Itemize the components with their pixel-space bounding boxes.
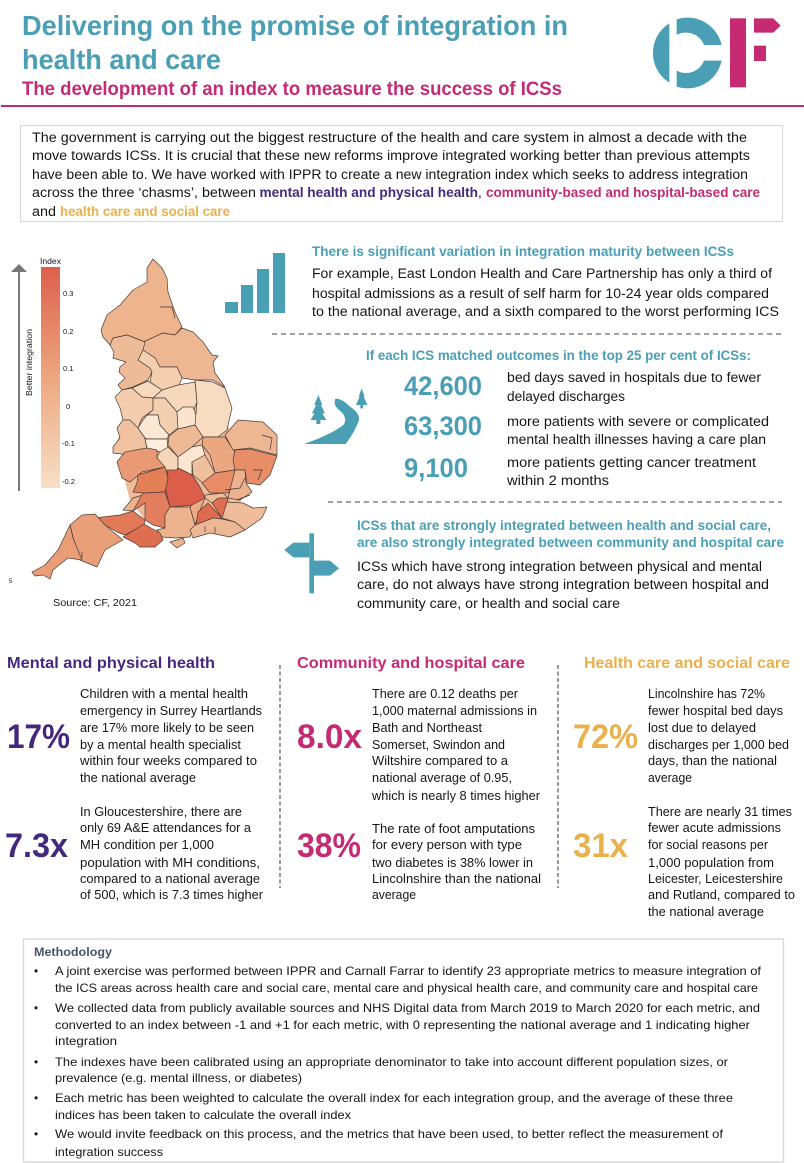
panel: health care and social care: Health care and social care: [584, 655, 790, 672]
finding: variation in maturity: hospital admissions as a result of self harm for 10-24 year olds compared: [312, 286, 769, 301]
panel: health care and social care: the national average: [648, 904, 764, 919]
statistic: bed days saved: delayed discharges: [507, 389, 625, 404]
panel: methodology: integration: [55, 1034, 117, 1048]
panel: community and hospital care: Community and hospital care: [297, 655, 525, 672]
header rule: [1, 105, 804, 107]
panel: mental and physical health: [5, 655, 264, 902]
panel: introduction: move towards ICSs. It is crucial that these new reforms improve integrated working better than previous attempts: [32, 148, 750, 163]
panel: community and hospital care: two diabetes is 38% lower in: [372, 855, 533, 870]
map marker label: 5: [9, 579, 13, 585]
panel: mental and physical health: 7.3x: [5, 827, 68, 865]
map legend: Better integration: [24, 329, 34, 396]
panel: health care and social care: lost due to delayed: [648, 720, 756, 735]
statistic: care plans: more patients with severe or complicated: [507, 414, 769, 429]
panel: community and hospital care: Somerset, Swindon and: [372, 737, 505, 752]
panel: mental and physical health: of 500, which is 7.3 times higher: [80, 887, 264, 902]
panel: community and hospital care: which is nearly 8 times higher: [371, 788, 541, 803]
panel: mental and physical health: Mental and physical health: [7, 655, 215, 672]
map source: Source: CF, 2021: [53, 597, 137, 609]
panel: methodology: Each metric has been weighted to calculate the overall index for each integration group, and the average of these three: [55, 1091, 733, 1105]
panel: mental and physical health: In Gloucestershire, there are: [80, 804, 242, 819]
finding: strongly integrated ICSs: ICSs which have strong integration between physical and mental: [357, 559, 762, 574]
statistic: care plans: [404, 411, 769, 447]
statistic: cancer treatment: 9,100: [404, 453, 468, 483]
panel: mental and physical health: only 69 A&E attendances for a: [80, 820, 252, 835]
subtitle: The development of an index to measure the success of ICSs: [22, 78, 562, 100]
panel: mental and physical health: MH condition per 1,000: [80, 837, 214, 852]
panel: health care and social care: There are nearly 31 times: [648, 804, 792, 819]
map legend: 0.2: [63, 327, 73, 336]
panel: community and hospital care: 1,000 maternal admissions in: [372, 703, 537, 718]
panel: introduction: across the three ‘chasms’, between: [32, 185, 256, 200]
panel: methodology: The indexes have been calibrated using an appropriate denominator to take into account different population sizes, or: [55, 1055, 728, 1069]
title: [22, 10, 568, 75]
icon: winding road and trees: [304, 388, 367, 444]
map legend: -0.1: [62, 439, 75, 448]
map legend: -0.2: [62, 477, 75, 486]
panel: introduction: ,: [478, 185, 482, 200]
map legend: [11, 256, 75, 491]
panel: mental and physical health: the national average: [80, 770, 196, 785]
panel: introduction: The government is carrying out the biggest restructure of the health and care system in almost a decade with the: [32, 130, 747, 145]
panel: methodology: •: [34, 1001, 38, 1015]
panel: methodology: We collected data from publicly available sources and NHS Digital data from March 2019 to March 2020 for each metric, and: [55, 1001, 760, 1015]
panel: health care and social care: 72%: [573, 718, 638, 756]
choropleth map of England: [32, 259, 277, 579]
finding: strongly integrated ICSs: [357, 518, 784, 611]
title: health and care: [22, 44, 221, 75]
icon: CF logo: [653, 18, 781, 88]
finding: variation in maturity: to the national average, and a sixth compared to the worst performing ICS: [312, 304, 779, 319]
icon: signpost: [284, 533, 339, 593]
panel: mental and physical health: population with MH conditions,: [80, 855, 260, 870]
panel: health care and social care: [573, 655, 795, 919]
panel: mental and physical health: Children with a mental health: [80, 686, 248, 701]
panel: community and hospital care: 38%: [297, 827, 361, 865]
panel: methodology: •: [34, 1127, 38, 1141]
panel: health care and social care: for social reasons per: [648, 837, 769, 852]
icon: bar chart: [225, 253, 285, 313]
panel: mental and physical health: 17%: [7, 718, 70, 756]
panel: methodology: Methodology: [34, 945, 112, 959]
panel: introduction: and: [32, 204, 56, 219]
panel: community and hospital care: average: [372, 887, 416, 902]
panel: community and hospital care: national average of 0.95,: [372, 770, 512, 785]
panel: mental and physical health: compared to a national average: [80, 871, 260, 886]
map legend: 0: [66, 402, 70, 411]
panel: mental and physical health: within four weeks compared to: [79, 753, 257, 768]
statistic: cancer treatment: [404, 453, 756, 488]
map legend: 0.1: [63, 364, 73, 373]
panel: community and hospital care: There are 0.12 deaths per: [372, 686, 519, 701]
finding: strongly integrated ICSs: ICSs that are strongly integrated between health and social care,: [357, 518, 771, 533]
panel: methodology: the ICS areas across health care and social care, mental care and physical health care, and community care and hospital care: [55, 981, 758, 995]
panel: introduction: have been able to. We have worked with IPPR to create a new integration index which seeks to address integration: [32, 167, 748, 182]
panel: health care and social care: average: [648, 770, 692, 785]
panel: methodology: [24, 939, 784, 1162]
panel: mental and physical health: are 17% more likely to be seen: [80, 720, 254, 735]
statistic: bed days saved: bed days saved in hospitals due to fewer: [507, 370, 762, 385]
statistic: cancer treatment: within 2 months: [506, 473, 609, 488]
panel: health care and social care: 31x: [573, 827, 628, 865]
panel: mental and physical health: by a mental health specialist: [80, 737, 241, 752]
panel: methodology: prevalence (e.g. mental illness, or diabetes): [55, 1071, 302, 1085]
panel: mental and physical health: emergency in Surrey Heartlands: [80, 703, 262, 718]
panel: community and hospital care: for every person with type: [372, 837, 522, 852]
panel: methodology: integration success: [55, 1145, 163, 1159]
finding: variation in maturity: For example, East London Health and Care Partnership has only a third of: [312, 266, 772, 281]
panel: health care and social care: 1,000 population from: [648, 855, 774, 870]
finding: strongly integrated ICSs: care, do not always have strong integration between hospital and: [357, 577, 769, 592]
panel: introduction: community-based and hospital-based care: [486, 185, 760, 200]
panel: methodology: converted to an index between -1 and +1 for each metric, with 0 representing the national average and 1 indicating higher: [55, 1018, 750, 1032]
panel: health care and social care: fewer acute admissions: [648, 820, 781, 835]
panel: health care and social care: discharges per 1,000 bed: [648, 737, 789, 752]
panel: introduction: health care and social care: [60, 204, 230, 219]
map legend: Index: [40, 256, 62, 266]
panel: community and hospital care: Lincolnshire than the national: [372, 871, 541, 886]
finding: variation in maturity: [312, 244, 779, 319]
panel: health care and social care: Leicester, Leicestershire: [648, 871, 783, 886]
title: Delivering on the promise of integration in: [22, 10, 568, 41]
panel: health care and social care: fewer hospital bed days: [648, 703, 783, 718]
panel: methodology: •: [34, 1091, 38, 1105]
statistic: cancer treatment: more patients getting cancer treatment: [507, 455, 756, 470]
panel: community and hospital care: 8.0x: [297, 718, 362, 756]
statistic: care plans: mental health illnesses having a care plan: [507, 432, 766, 447]
panel: health care and social care: and Rutland, compared to: [648, 887, 795, 902]
panel: methodology: A joint exercise was performed between IPPR and Carnall Farrar to identify 23 appropriate metrics to measure integration of: [55, 964, 762, 978]
heading: top 25 per cent: If each ICS matched outcomes in the top 25 per cent of ICSs:: [366, 348, 751, 363]
panel: community and hospital care: Wiltshire compared to a: [372, 753, 509, 768]
panel: health care and social care: days, than the national: [648, 753, 777, 768]
map legend: 0.3: [63, 289, 73, 298]
panel: methodology: indices has been taken to calculate the overall index: [55, 1108, 351, 1122]
panel: methodology: We would invite feedback on this process, and the metrics that have been used, to better reflect the measurement of: [55, 1127, 724, 1141]
finding: variation in maturity: There is significant variation in integration maturity between ICSs: [312, 244, 734, 259]
panel: methodology: •: [34, 1055, 38, 1069]
finding: strongly integrated ICSs: community care, or health and social care: [357, 596, 620, 611]
finding: strongly integrated ICSs: are also strongly integrated between community and hospital care: [357, 535, 784, 550]
panel: community and hospital care: [297, 655, 541, 902]
statistic: bed days saved: 42,600: [404, 371, 482, 401]
panel: health care and social care: Lincolnshire has 72%: [648, 686, 765, 701]
panel: introduction: mental health and physical health: [260, 185, 478, 200]
panel: methodology: •: [34, 964, 38, 978]
statistic: care plans: 63,300: [404, 411, 482, 441]
panel: community and hospital care: The rate of foot amputations: [372, 821, 535, 836]
panel: community and hospital care: Bath and Northeast: [372, 720, 482, 735]
panel: introduction: [20, 126, 782, 222]
statistic: bed days saved: [404, 370, 762, 404]
